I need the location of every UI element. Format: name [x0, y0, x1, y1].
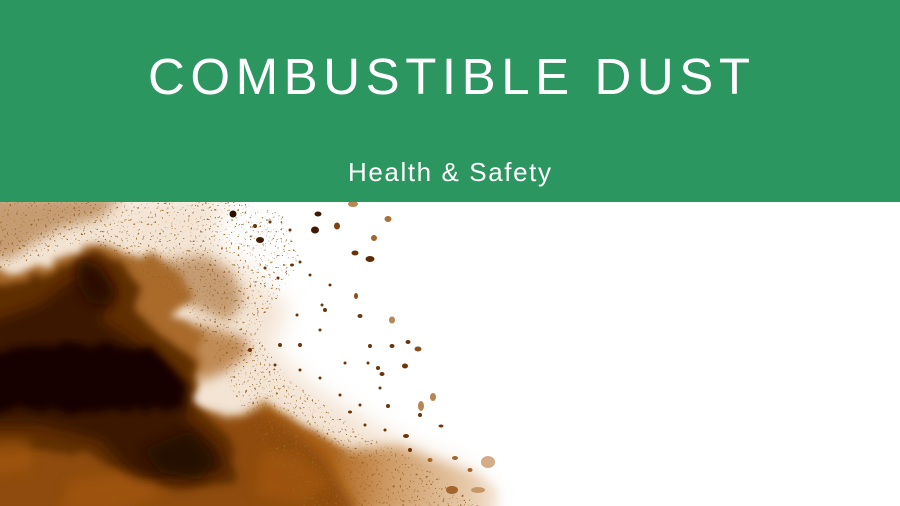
tan tongue on right of core — [160, 320, 250, 382]
shadow lower streak — [142, 430, 215, 480]
title: COMBUSTIBLE DUST — [148, 48, 750, 105]
pale haze — [0, 202, 478, 476]
fine speckle — [0, 202, 480, 506]
light brown mid dust — [0, 244, 345, 506]
green header band — [0, 0, 900, 202]
dust cloud — [0, 195, 500, 506]
black core — [0, 345, 188, 412]
tapering tail of the plume — [240, 404, 498, 506]
lighter orange patches — [0, 440, 330, 506]
brown body — [0, 250, 236, 492]
subtitle: Health & Safety — [348, 157, 551, 187]
loose dust particles — [230, 201, 495, 494]
dark brown patches — [0, 272, 225, 478]
dark plume core — [76, 258, 115, 306]
orange brown lower body — [0, 395, 360, 506]
upper-left tan dust — [0, 195, 244, 322]
